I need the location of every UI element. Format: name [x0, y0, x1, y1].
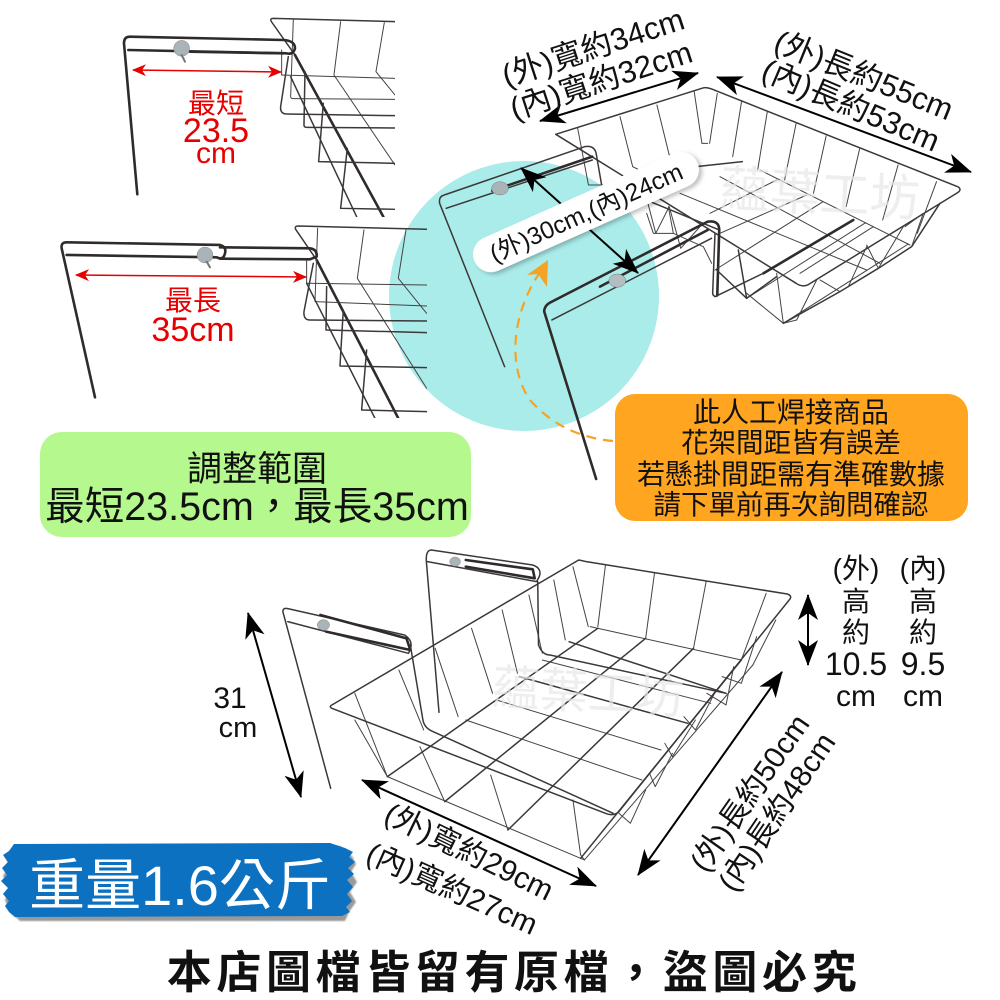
panel: adjustment range: 調整範圍	[187, 450, 327, 489]
label: outer height: 高	[842, 586, 870, 617]
label: bracket height 31 cm: cm	[219, 712, 257, 744]
label: top length: (內)長約53cm	[757, 52, 945, 159]
label: outer height: (外)	[833, 553, 879, 584]
watermark: lower basket: 蘊葉工坊	[491, 662, 685, 725]
label: shortest 23.5 cm: 23.5	[183, 112, 249, 150]
label: inner height: 約	[909, 617, 937, 648]
label: inner height: 9.5	[901, 646, 945, 682]
label: outer height: 10.5	[825, 646, 887, 682]
footer notice: 本店圖檔皆留有原檔，盜圖必究	[167, 947, 861, 998]
badge: weight 1.6 kg: 重量1.6公斤	[29, 854, 331, 917]
label: longest 35 cm	[151, 285, 235, 349]
callout: manual welding notice: 若懸掛間距需有準確數據	[637, 459, 945, 490]
photo: lower basket with brackets	[283, 550, 791, 860]
label: inner height: 高	[909, 586, 937, 617]
label: lower width: (外)寬約29cm	[379, 797, 558, 907]
label: longest 35 cm: 35cm	[151, 311, 235, 349]
label: lower length: (外)長約50cm	[684, 709, 817, 878]
label: outer height	[825, 553, 887, 713]
label: top width: (外)寬約34cm	[498, 2, 689, 93]
arrow: top width	[540, 73, 698, 121]
label: bracket height 31 cm: 31	[213, 682, 247, 715]
arrow: lower length	[638, 672, 782, 875]
label: top width: (內)寬約32cm	[506, 35, 697, 126]
panel: adjustment range: 最短23.5cm，最長35cm	[45, 485, 469, 529]
teal circle background	[389, 161, 659, 431]
label: shortest 23.5 cm	[183, 88, 249, 170]
label: shortest 23.5 cm: cm	[196, 137, 236, 170]
badge: weight 1.6 kg	[1, 843, 357, 921]
callout: manual welding notice: 此人工焊接商品	[693, 397, 889, 428]
label: top length: (外)長約55cm	[769, 24, 958, 127]
label: lower length: (內)長約48cm	[712, 727, 842, 898]
label: lower width: (內)寬約27cm	[361, 837, 542, 942]
callout: manual welding notice: 花架間距皆有誤差	[681, 427, 901, 458]
callout: manual welding notice: 請下單前再次詢問確認	[654, 489, 928, 520]
arrow: bracket spacing	[521, 168, 638, 273]
label: inner height: cm	[903, 680, 943, 713]
photo: top-right basket with brackets	[439, 88, 960, 479]
label: bracket height 31 cm	[213, 682, 257, 744]
label: longest 35 cm: 最長	[165, 285, 221, 316]
photo: shortest bracket setting with basket	[124, 18, 395, 217]
label pill: bracket spacing: (外)30cm,(內)24cm	[486, 158, 687, 268]
photo: longest bracket setting with basket	[62, 226, 427, 418]
label: inner height	[900, 553, 946, 713]
arrow: shortest span	[133, 70, 281, 72]
arrow: lower width	[362, 780, 596, 886]
label: lower width	[361, 797, 558, 942]
arrow: top length	[717, 77, 971, 172]
arrow: bracket height	[248, 613, 301, 797]
arrow: basket height	[807, 595, 809, 665]
label: outer height: cm	[836, 680, 876, 713]
arrow: dashed orange callout pointer	[515, 260, 613, 441]
arrow: longest span	[76, 275, 306, 277]
watermark: top basket: 蘊葉工坊	[718, 161, 921, 227]
label: outer height: 約	[842, 617, 870, 648]
panel: adjustment range	[40, 432, 471, 537]
label: shortest 23.5 cm: 最短	[188, 88, 244, 119]
callout: manual welding notice	[615, 394, 968, 521]
label: inner height: (內)	[900, 553, 946, 584]
